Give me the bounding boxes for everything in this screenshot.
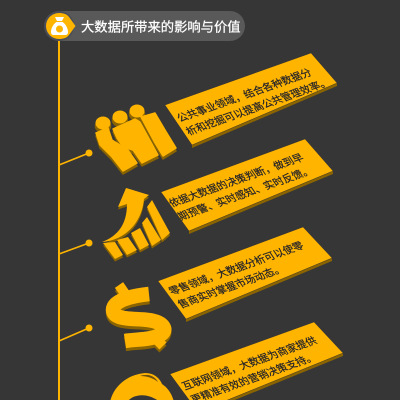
title: 大数据所带来的影响与价值 <box>81 20 241 34</box>
icon: people <box>96 104 176 174</box>
text: retail: 售商实时掌握市场动态。 <box>175 263 287 311</box>
header pill <box>44 11 245 41</box>
text: public sector: 析和挖掘可以提高公共管理效率。 <box>183 76 333 138</box>
icon: money bag badge <box>46 13 76 39</box>
text: internet: 互联网领域，大数据为商家提供 <box>179 334 319 393</box>
text: public sector: 公共事业领域，结合各种数据分 <box>174 66 314 125</box>
panel: retail <box>158 227 332 322</box>
panel: internet <box>170 322 343 400</box>
icon: partial at-sign shape <box>110 373 174 400</box>
panel: public sector <box>165 53 337 148</box>
panel: decision making <box>161 139 333 234</box>
text: retail: 零售领域，大数据分析可以使零 <box>166 239 307 298</box>
icon: rising arrow and bars <box>102 188 170 262</box>
text: decision making: 依据大数据的决策判断，做到早 <box>166 151 306 210</box>
icon: dollar sign <box>113 285 164 349</box>
timeline with branches <box>59 36 92 400</box>
text: decision making: 期预警、实时感知、实时反馈。 <box>175 164 315 223</box>
